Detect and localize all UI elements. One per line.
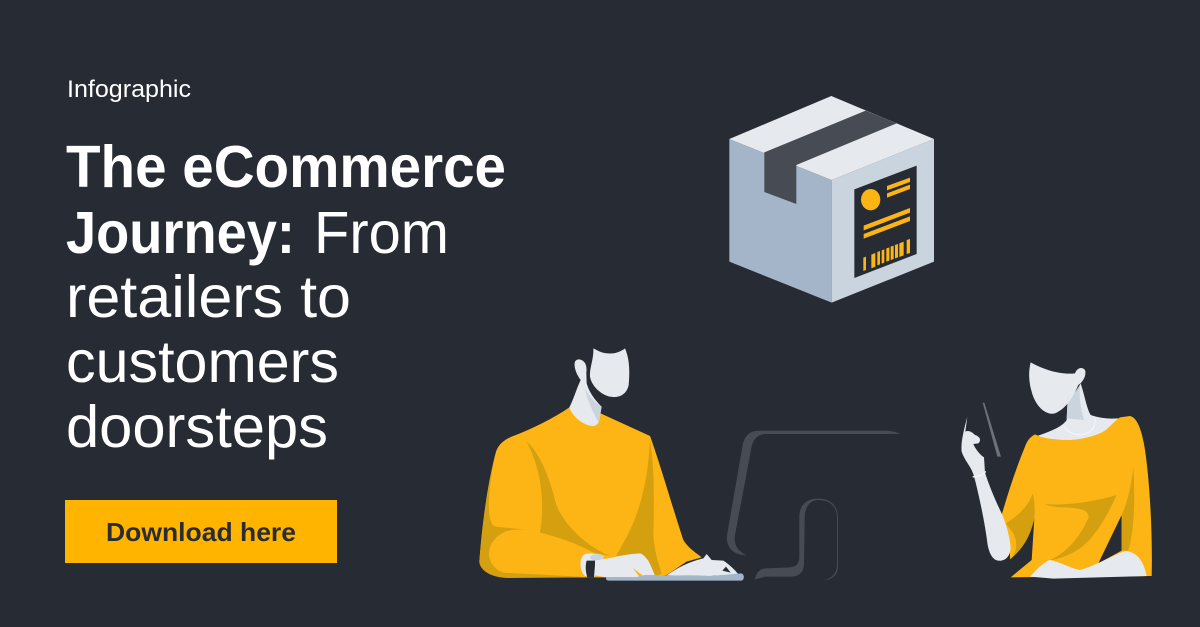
man neck and head: [569, 348, 629, 426]
woman bracelet: [973, 471, 986, 477]
title: retailers to: [66, 264, 351, 330]
illustration: man at computer: [479, 348, 744, 581]
woman arm and hand: [961, 417, 1011, 561]
woman forearms on table: [1030, 551, 1147, 579]
woman neck: [1033, 383, 1127, 440]
man hands and watch: [580, 553, 738, 578]
woman sweater: [1002, 416, 1152, 577]
illustration: woman with phone: [961, 362, 1152, 579]
download button: [65, 500, 337, 563]
monitor stand: [755, 499, 838, 581]
title: The eCommerce: [66, 134, 506, 200]
title: customers: [66, 329, 339, 395]
illustration: computer monitor: [727, 431, 900, 581]
title: doorsteps: [66, 394, 328, 460]
phone: [983, 403, 1001, 457]
title: From: [314, 200, 449, 266]
keyboard: [606, 573, 744, 581]
download button: Download here: [106, 517, 296, 547]
monitor screen edge: [727, 431, 900, 555]
man sweater: [479, 407, 702, 578]
icon: parcel box: [729, 96, 934, 303]
title: [66, 134, 506, 460]
eyebrow label: Infographic: [67, 76, 191, 103]
title: Journey:: [66, 200, 295, 266]
woman head: [1029, 362, 1085, 414]
